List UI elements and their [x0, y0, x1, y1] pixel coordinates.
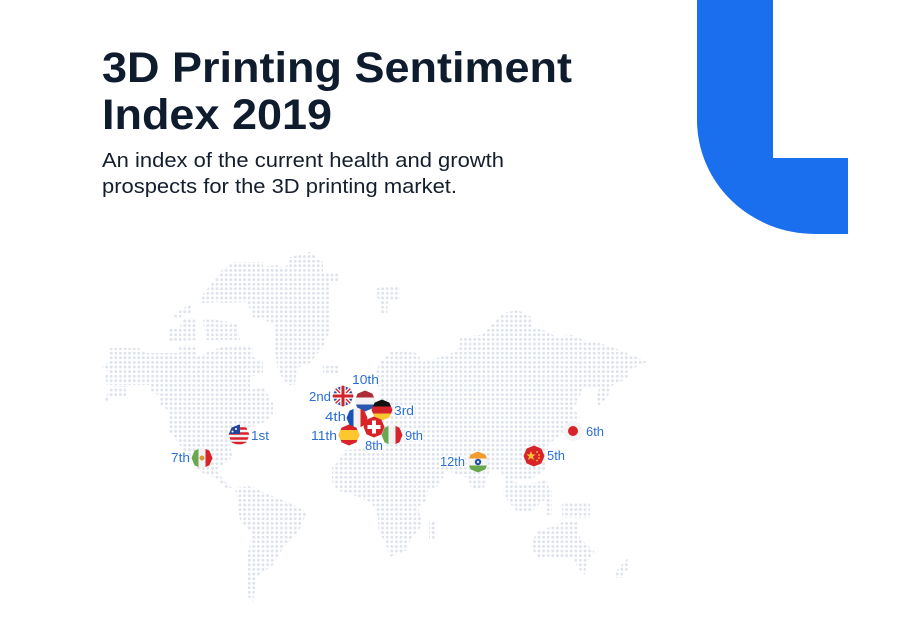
rank label: 10th: 10th: [352, 372, 379, 387]
flag: Mexico: [192, 448, 212, 468]
flag: United States: [228, 424, 250, 446]
rank label: 12th: 12th: [440, 454, 465, 469]
subtitle: prospects for the 3D printing market.: [102, 176, 457, 198]
subtitle: An index of the current health and growth: [102, 150, 504, 172]
flag: Japan: [562, 421, 583, 441]
rank label: 4th: 4th: [325, 409, 346, 424]
rank label: 11th: 11th: [311, 428, 337, 443]
flag: Netherlands: [354, 390, 376, 412]
rank label: 5th: 5th: [547, 448, 565, 463]
flag: China: [523, 445, 545, 467]
rank label: 3rd: 3rd: [394, 403, 414, 418]
dotted world map: [102, 252, 650, 602]
title: 3D Printing Sentiment: [102, 44, 572, 92]
flag: France: [346, 408, 368, 428]
rank label: 9th: 9th: [405, 428, 423, 443]
title: Index 2019: [102, 91, 332, 139]
rank label: 7th: 7th: [171, 450, 190, 465]
subtitle: [102, 150, 504, 198]
flag: Germany: [372, 400, 392, 420]
rank label: 1st: 1st: [251, 428, 269, 443]
infographic canvas: [102, 0, 848, 602]
title: [102, 44, 572, 139]
flag: Spain: [338, 424, 360, 446]
rank label: 8th: 8th: [365, 438, 383, 453]
flag: Switzerland: [363, 416, 385, 438]
flag: Italy: [382, 424, 402, 446]
rank label: 6th: 6th: [586, 424, 604, 439]
flag: United Kingdom: [332, 385, 354, 407]
flag: India: [468, 452, 488, 472]
decorative blue L shape: [697, 0, 848, 234]
rank label: 2nd: 2nd: [309, 389, 331, 404]
